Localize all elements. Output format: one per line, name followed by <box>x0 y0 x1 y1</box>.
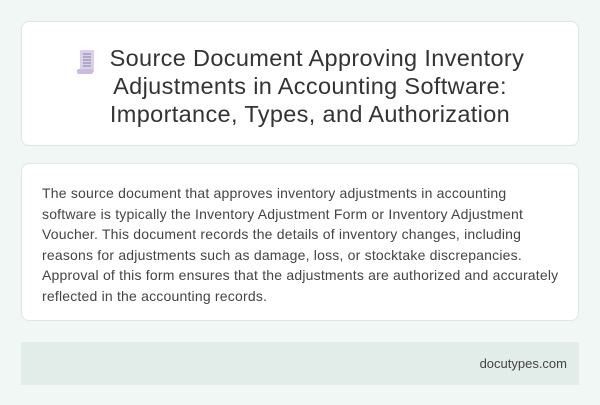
title: Adjustments in Accounting Software: <box>113 73 507 99</box>
title <box>110 45 524 127</box>
text block: software is typically the Inventory Adjustment Form or Inventory Adjustment <box>42 206 523 222</box>
icon: document <box>77 50 94 74</box>
panel: title card <box>21 21 579 146</box>
footer <box>21 342 579 385</box>
title: Importance, Types, and Authorization <box>110 101 510 127</box>
text block: Approval of this form ensures that the adjustments are authorized and accurately <box>42 267 558 283</box>
text block: reflected in the accounting records. <box>42 288 267 304</box>
text block: Voucher. This document records the details of inventory changes, including <box>42 226 521 242</box>
text block <box>42 185 558 304</box>
title: Source Document Approving Inventory <box>110 45 524 71</box>
text block: The source document that approves inventory adjustments in accounting <box>42 185 506 201</box>
text block: reasons for adjustments such as damage, loss, or stocktake discrepancies. <box>42 246 522 262</box>
footer: docutypes.com <box>480 356 567 371</box>
panel: description <box>21 163 579 321</box>
